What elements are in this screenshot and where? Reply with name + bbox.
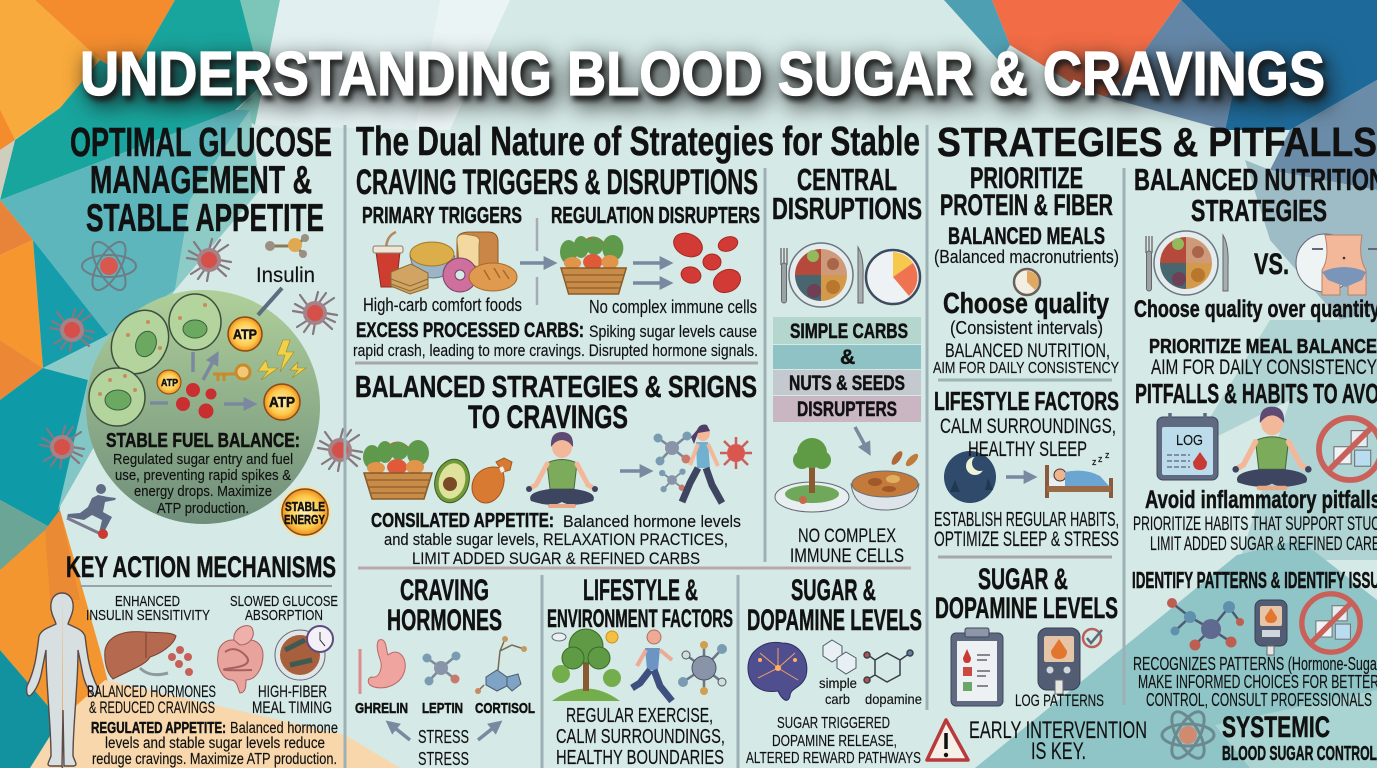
icon: comfort foods bbox=[373, 232, 517, 294]
caption: no complex immune cells: NO COMPLEX bbox=[798, 526, 896, 547]
icon: intestines bbox=[218, 626, 263, 693]
text: balanced meals bbox=[934, 223, 1119, 267]
label: insulin: Insulin bbox=[256, 264, 315, 287]
heading: key action mechanisms: KEY ACTION MECHANISMS bbox=[66, 551, 336, 584]
heading: craving triggers: CRAVING TRIGGERS & DISRUPTIONS bbox=[356, 163, 758, 202]
icon: molecule bbox=[678, 641, 727, 695]
panel: prioritize protein and fiber bbox=[933, 162, 1119, 710]
icon: plate bbox=[1146, 231, 1228, 295]
text: sugar triggered: ALTERED REWARD PATHWAYS bbox=[746, 750, 921, 767]
text: regular exercise: CALM SURROUNDINGS, bbox=[556, 726, 725, 748]
heading: balanced strategies bbox=[355, 369, 757, 435]
icon: red blood cells bbox=[670, 229, 744, 297]
icon: healthy basket bbox=[363, 440, 432, 499]
heading: optimal glucose: STABLE APPETITE bbox=[86, 197, 324, 240]
icon: clock bbox=[866, 250, 920, 304]
arrows: basket to blood cells bbox=[633, 263, 668, 283]
text: zzz: z bbox=[1092, 457, 1097, 467]
heading: optimal glucose: OPTIMAL GLUCOSE bbox=[70, 119, 332, 165]
text: choose quality: (Consistent intervals) bbox=[950, 318, 1103, 338]
icon: network molecule bbox=[1167, 598, 1244, 650]
badge: stable energy bbox=[279, 486, 331, 538]
text: lifestyle factors: LIFESTYLE FACTORS bbox=[934, 386, 1119, 416]
heading: optimal glucose: MANAGEMENT & bbox=[90, 159, 312, 202]
heading: central disruptions: DISRUPTIONS bbox=[772, 191, 922, 226]
icon: fibre meal with clock bbox=[275, 626, 333, 680]
text: early intervention: IS KEY. bbox=[1031, 738, 1086, 765]
text: consilated appetite: and stable sugar levels, RELAXATION PRACTICES, bbox=[384, 530, 728, 549]
text: choose quality: AIM FOR DAILY CONSISTENCY bbox=[933, 360, 1119, 377]
heading: optimal glucose bbox=[70, 119, 332, 240]
arrow: to active person bbox=[620, 469, 648, 473]
icon: cortisol molecule bbox=[475, 636, 527, 694]
text: choose quality bbox=[933, 288, 1119, 377]
text: excess processed carbs: EXCESS PROCESSED CARBS: bbox=[356, 319, 584, 342]
icon: chicken drumstick bbox=[472, 458, 512, 503]
label: slowed glucose absorption: ABSORPTION bbox=[245, 608, 323, 624]
heading: lifestyle: ENVIRONMENT FACTORS bbox=[547, 605, 733, 633]
icon: clipboard bbox=[951, 628, 1003, 706]
icon: waist vs plate bbox=[1296, 234, 1377, 295]
bands: carbs and seeds: & bbox=[840, 346, 855, 369]
icon: nut bowl bbox=[851, 449, 920, 510]
icon: small clock bbox=[1014, 269, 1040, 295]
panel: sugar and dopamine bbox=[746, 574, 922, 767]
label: enhanced insulin sensitivity: INSULIN SENSITIVITY bbox=[86, 608, 210, 624]
label: high-fiber meal timing: HIGH-FIBER bbox=[258, 683, 327, 701]
heading: balanced strategies: TO CRAVINGS bbox=[468, 399, 628, 435]
icon: meter bbox=[1255, 600, 1287, 655]
labels: stress bbox=[418, 727, 469, 768]
badge: ATP lower bbox=[264, 384, 300, 420]
panel: key action mechanisms bbox=[27, 551, 338, 768]
icon: carb hexagons bbox=[823, 640, 856, 674]
icon: no sugar bbox=[1319, 418, 1377, 480]
label: high-fiber meal timing bbox=[252, 683, 332, 717]
icon: glucose meter bbox=[1038, 628, 1080, 694]
icon: log calendar bbox=[1157, 413, 1218, 480]
text: excess processed carbs: rapid crash, leading to more cravings. Disrupted hormone signals. bbox=[353, 341, 758, 360]
panel: craving triggers and disruptions bbox=[353, 163, 760, 363]
text: excess processed carbs: Spiking sugar levels cause bbox=[589, 322, 757, 341]
text: stable fuel balance: use, preventing rapid spikes & bbox=[115, 467, 291, 484]
caption: no complex immune cells: IMMUNE CELLS bbox=[790, 546, 904, 567]
caption: comfort foods: High-carb comfort foods bbox=[363, 295, 522, 315]
icon: meditating person bbox=[1232, 407, 1312, 488]
text: stable fuel balance: ATP production. bbox=[157, 500, 249, 517]
bands: carbs and seeds: NUTS & SEEDS bbox=[789, 372, 905, 395]
text: regulated appetite: reduge cravings. Maximize ATP production. bbox=[92, 751, 337, 768]
text: stable fuel balance: Regulated sugar entry and fuel bbox=[113, 451, 293, 468]
heading: sugar dopamine centre: DOPAMINE LEVELS bbox=[747, 604, 922, 637]
label: enhanced insulin sensitivity bbox=[86, 594, 210, 624]
icon: no sugar bbox=[1302, 594, 1360, 652]
badge: stable energy: ENERGY bbox=[284, 513, 326, 527]
heading: craving hormones: HORMONES bbox=[387, 604, 502, 637]
text: balanced meals: BALANCED MEALS bbox=[948, 223, 1105, 250]
labels: hormones: LEPTIN bbox=[422, 700, 463, 717]
heading: balanced nutrition bbox=[1134, 162, 1377, 228]
heading: sugar dopamine centre: SUGAR & bbox=[791, 574, 876, 607]
text: establish habits: OPTIMIZE SLEEP & STRESS bbox=[934, 528, 1119, 551]
text: regulated appetite: levels and stable sugar levels reduce bbox=[105, 735, 325, 752]
caption: no complex immune cells bbox=[790, 526, 904, 567]
heading: craving hormones: CRAVING bbox=[400, 574, 489, 607]
labels: stress: STRESS bbox=[418, 727, 469, 747]
callout: early intervention bbox=[927, 717, 1147, 765]
label: enhanced insulin sensitivity: ENHANCED bbox=[115, 594, 180, 610]
label: slowed glucose absorption bbox=[230, 594, 338, 624]
badge: ATP large bbox=[228, 317, 262, 351]
labels: simple carb and dopamine: dopamine bbox=[865, 691, 922, 707]
icon: plate and cutlery bbox=[781, 243, 863, 307]
text: zzz: z bbox=[1098, 454, 1103, 464]
text: avoid pitfalls bbox=[1133, 486, 1377, 555]
icon: warning triangle bbox=[927, 720, 968, 760]
label: vs: VS. bbox=[1254, 248, 1289, 281]
heading: lifestyle bbox=[547, 574, 733, 633]
text: excess processed carbs bbox=[353, 319, 758, 360]
text: regulated appetite bbox=[91, 720, 338, 768]
heading: dual nature: The Dual Nature of Strategies for Stable bbox=[356, 118, 920, 164]
subheading: primary triggers: PRIMARY TRIGGERS bbox=[362, 202, 522, 228]
text: stable fuel balance: energy drops. Maximize bbox=[134, 483, 272, 500]
icon: red dots bbox=[168, 646, 193, 676]
badge: stable energy: STABLE bbox=[285, 500, 325, 514]
text: stable fuel balance: STABLE FUEL BALANCE: bbox=[106, 430, 300, 452]
text: balanced meals: (Balanced macronutrients) bbox=[934, 247, 1119, 267]
panel: lifestyle and environment bbox=[547, 574, 733, 768]
text: early intervention: EARLY INTERVENTION bbox=[969, 717, 1147, 744]
heading: prioritize protein: PRIORITIZE bbox=[970, 162, 1083, 195]
icon: avocado bbox=[430, 455, 474, 507]
illustration: green cell sphere bbox=[86, 288, 320, 524]
text: consilated appetite: Balanced hormone levels bbox=[563, 512, 741, 531]
heading: sugar dopamine centre bbox=[747, 574, 922, 637]
icon: log calendar: LOG bbox=[1176, 432, 1203, 449]
icon: atom bbox=[82, 237, 136, 295]
labels: hormones bbox=[355, 700, 535, 717]
text: consilated appetite: CONSILATED APPETITE: bbox=[371, 510, 554, 532]
icon: molecules bbox=[654, 432, 752, 492]
labels: hormones: GHRELIN bbox=[355, 700, 408, 717]
label: log patterns: LOG PATTERNS bbox=[1015, 691, 1104, 710]
icon: runner bbox=[632, 630, 672, 701]
text: sugar triggered bbox=[746, 715, 921, 767]
heading: sugar dopamine right: DOPAMINE LEVELS bbox=[935, 592, 1118, 625]
labels: simple carb and dopamine: carb bbox=[825, 691, 850, 707]
badge: ATP small: ATP bbox=[161, 377, 178, 389]
subheading: regulation disrupters: REGULATION DISRUPTERS bbox=[551, 202, 760, 228]
heading: central disruptions bbox=[772, 162, 922, 226]
icon: person in bed bbox=[1045, 465, 1113, 498]
text: choose quality: BALANCED NUTRITION, bbox=[945, 341, 1110, 362]
icon: brain bbox=[748, 642, 807, 700]
icon: leptin molecule bbox=[422, 652, 460, 686]
labels: simple carb and dopamine: simple bbox=[819, 675, 857, 691]
text: choose quality: Choose quality bbox=[943, 288, 1109, 320]
text: early intervention bbox=[969, 717, 1147, 765]
bands: carbs and seeds: DISRUPTERS bbox=[797, 398, 897, 421]
heading: prioritize protein bbox=[940, 162, 1113, 222]
text: regulated appetite: Balanced hormone bbox=[230, 720, 338, 737]
text: regular exercise bbox=[556, 705, 725, 768]
heading: craving hormones bbox=[387, 574, 502, 637]
text: stable fuel balance bbox=[106, 430, 300, 517]
icon: atom bbox=[1162, 707, 1214, 763]
icon: vegetable basket bbox=[560, 235, 626, 294]
icon: human body bbox=[27, 593, 97, 768]
heading: balanced strategies: BALANCED STRATEGIES & SRIGNS bbox=[355, 369, 757, 404]
text: recognizes patterns bbox=[1133, 654, 1377, 710]
text: meal balance bbox=[1149, 336, 1377, 379]
text: sugar triggered: SUGAR TRIGGERED bbox=[777, 715, 890, 732]
panel: balanced nutrition strategies bbox=[1132, 162, 1377, 710]
heading: prioritize protein: PROTEIN & FIBER bbox=[940, 189, 1113, 222]
icon: night moon bbox=[944, 451, 996, 503]
callout: systemic blood sugar control bbox=[1162, 707, 1377, 765]
panel: balanced strategies bbox=[355, 369, 911, 568]
icon: walking woman bbox=[682, 425, 722, 503]
text: regular exercise: REGULAR EXERCISE, bbox=[566, 705, 713, 727]
panel: central disruptions bbox=[772, 162, 922, 567]
badge: ATP lower: ATP bbox=[269, 394, 295, 411]
text: consilated appetite: LIMIT ADDED SUGAR & REFINED CARBS bbox=[412, 549, 700, 568]
arrow: down to food bbox=[855, 427, 868, 451]
heading: sugar dopamine right: SUGAR & bbox=[978, 563, 1068, 596]
icon: dopamine molecule bbox=[864, 650, 913, 683]
text: lifestyle factors bbox=[934, 386, 1119, 438]
bands: carbs and seeds: SIMPLE CARBS bbox=[790, 320, 908, 343]
label: balanced hormones: BALANCED HORMONES bbox=[87, 683, 216, 701]
text: systemic bbox=[1222, 711, 1377, 765]
label: slowed glucose absorption: SLOWED GLUCOSE bbox=[230, 594, 338, 610]
badge: ATP large: ATP bbox=[233, 326, 257, 342]
text: zzz: z bbox=[1105, 450, 1110, 460]
icon: check badge bbox=[1083, 629, 1102, 647]
icon: runner bbox=[67, 484, 116, 539]
arrow: foods to basket bbox=[520, 261, 552, 265]
label: high-fiber meal timing: MEAL TIMING bbox=[252, 699, 332, 717]
text: zzz bbox=[1092, 450, 1110, 467]
labels: simple carb and dopamine bbox=[819, 675, 922, 707]
panel: craving hormones bbox=[355, 574, 535, 768]
bands: carbs and seeds bbox=[773, 317, 921, 422]
text: consilated appetite bbox=[371, 510, 741, 568]
text: systemic: SYSTEMIC bbox=[1222, 711, 1330, 744]
icon: liver bbox=[105, 632, 176, 679]
text: establish habits: ESTABLISH REGULAR HABITS, bbox=[934, 509, 1119, 531]
arrows: stress to hormones bbox=[390, 724, 498, 740]
text: regulated appetite: REGULATED APPETITE: bbox=[91, 720, 226, 737]
label: balanced hormones: & REDUCED CRAVINGS bbox=[89, 699, 215, 717]
icon: trees and hill bbox=[552, 629, 621, 701]
caption: no immune cells: No complex immune cells bbox=[589, 297, 757, 317]
text: lifestyle factors: CALM SURROUNDINGS, bbox=[940, 415, 1116, 438]
label: balanced hormones bbox=[87, 683, 216, 717]
icon: insulin molecule bbox=[265, 234, 309, 258]
icon: floating viruses bbox=[40, 239, 362, 471]
icon: stomach bbox=[360, 640, 405, 694]
text: establish habits bbox=[934, 509, 1119, 551]
heading: sugar dopamine right bbox=[935, 563, 1118, 625]
text: healthy sleep: HEALTHY SLEEP bbox=[968, 438, 1087, 461]
badge: ATP small bbox=[157, 370, 181, 394]
text: sugar triggered: DOPAMINE RELEASE, bbox=[772, 733, 897, 750]
icon: salad with tree bbox=[775, 438, 849, 512]
heading: lifestyle: LIFESTYLE & bbox=[583, 574, 698, 607]
arrow: moon to bed bbox=[1006, 475, 1032, 479]
heading: central disruptions: CENTRAL bbox=[797, 162, 897, 197]
icon: meditating person bbox=[526, 432, 598, 506]
panel: optimal glucose management bbox=[40, 119, 362, 539]
labels: hormones: CORTISOL bbox=[475, 700, 535, 717]
